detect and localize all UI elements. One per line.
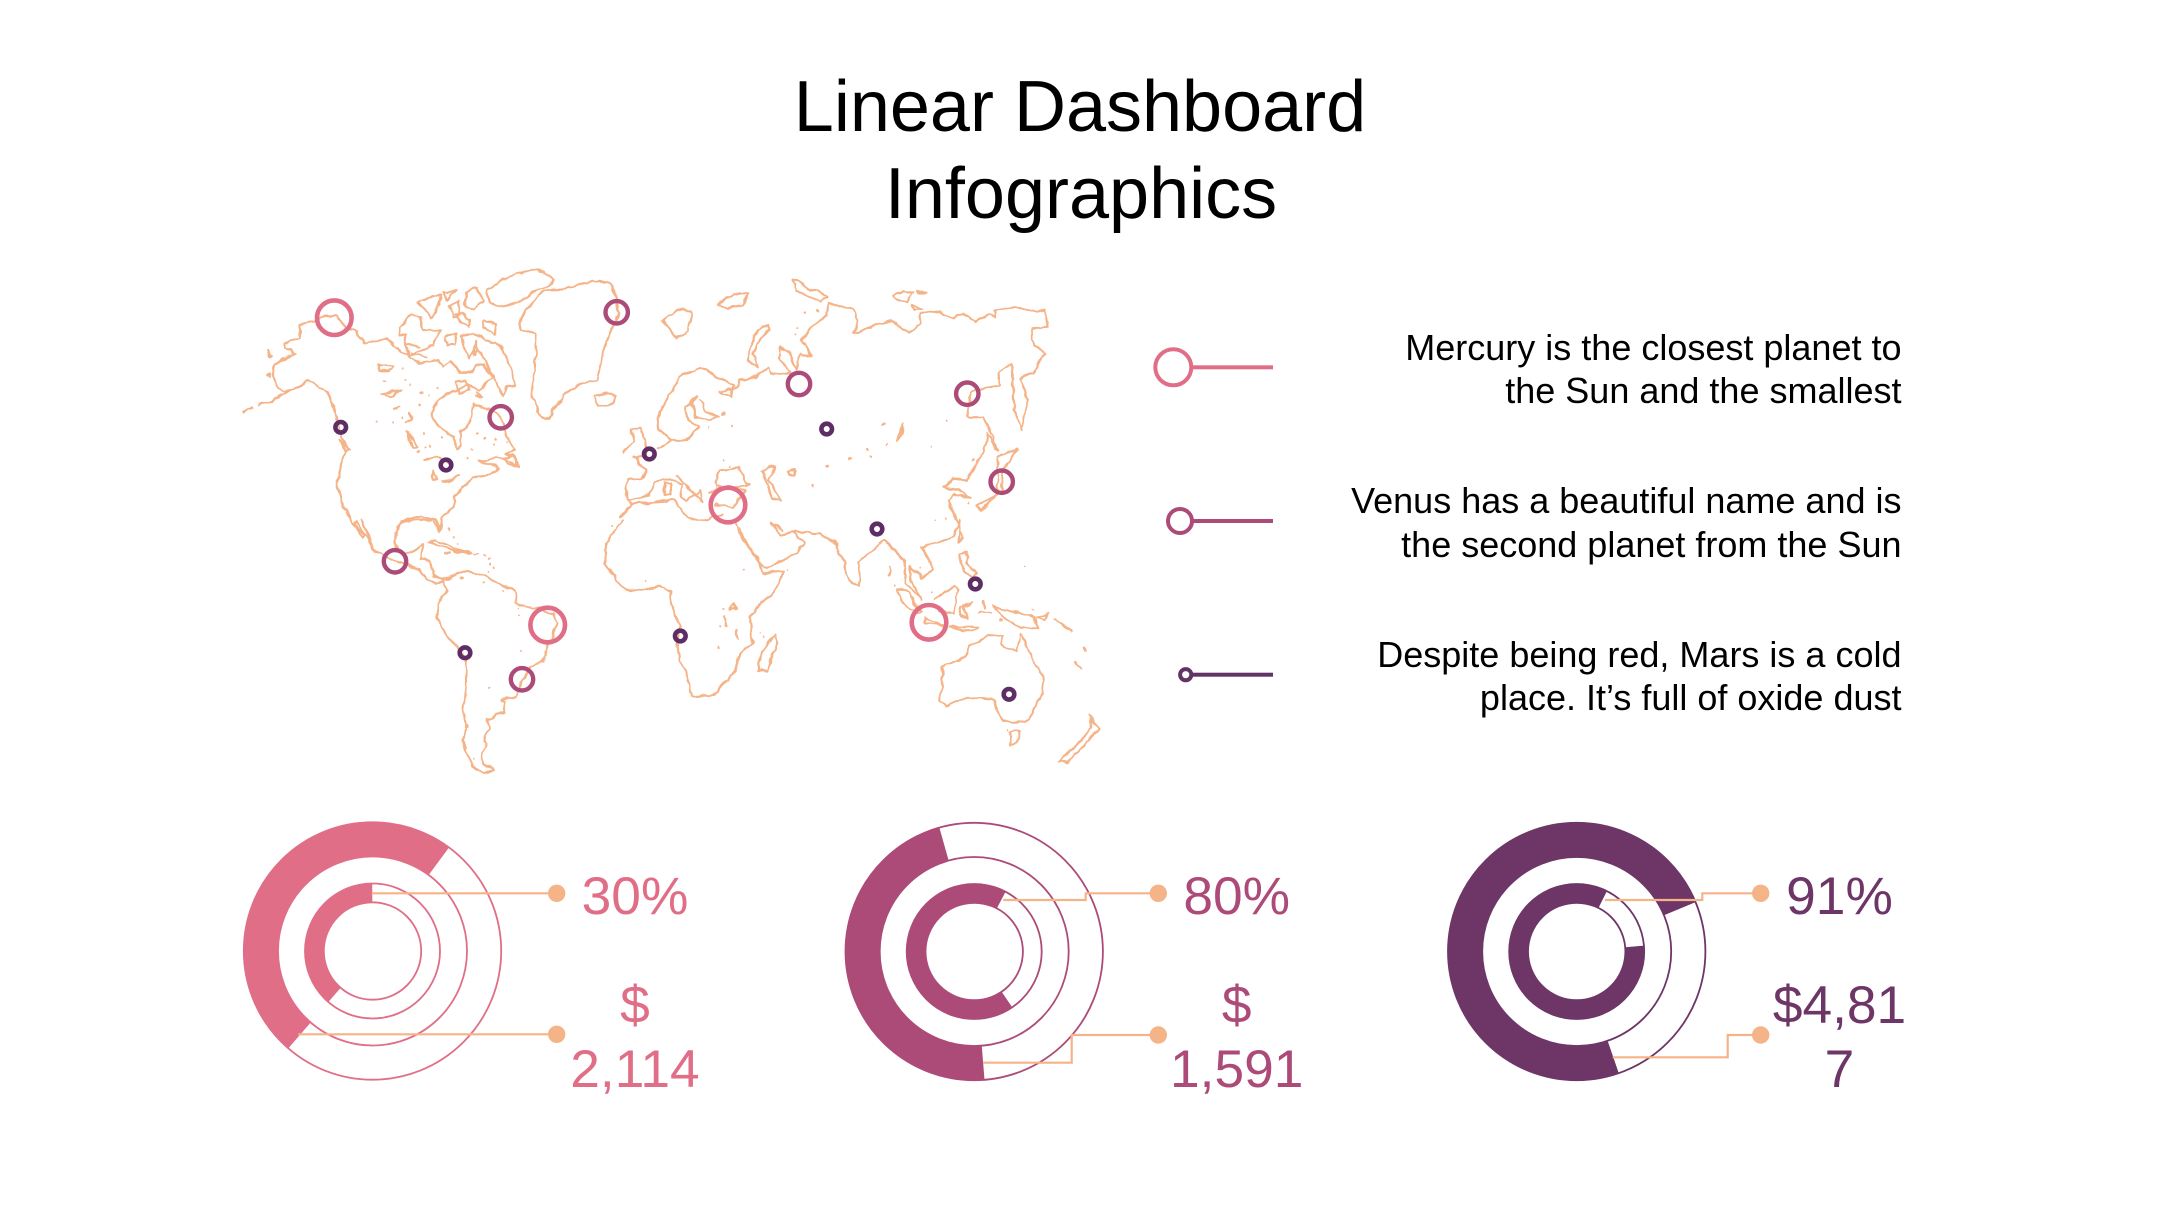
- legend: Mars: [1180, 634, 1902, 718]
- title: Infographics: [885, 154, 1277, 234]
- donut chart: magenta: [846, 823, 1103, 1080]
- leader lines: [1605, 885, 1769, 1057]
- map markers: medium magenta: [384, 301, 1013, 690]
- values: [1170, 867, 1303, 1099]
- world map: [243, 270, 1100, 773]
- leader lines: [983, 885, 1167, 1063]
- values: $4,81: [1773, 976, 1906, 1035]
- leader lines: [298, 885, 565, 1043]
- title: [794, 67, 1366, 234]
- values: 1,591: [1170, 1040, 1303, 1099]
- values: 80%: [1183, 867, 1290, 926]
- values: [570, 867, 700, 1099]
- donut panel: 91% / $4,817: [1448, 823, 1906, 1099]
- values: [1773, 867, 1906, 1099]
- donut chart: purple: [1448, 823, 1705, 1080]
- donut panel: 80% / $1,591: [846, 823, 1303, 1099]
- map markers: small purple: [335, 422, 1014, 700]
- values: 2,114: [570, 1040, 700, 1099]
- legend: Venus: Venus has a beautiful name and is: [1351, 480, 1902, 521]
- legend: Venus: [1168, 480, 1902, 565]
- values: 91%: [1786, 867, 1893, 926]
- donut panel: 30% / $2,114: [244, 822, 700, 1099]
- legend: Mercury: Mercury is the closest planet to: [1405, 327, 1902, 368]
- values: 7: [1825, 1040, 1854, 1099]
- title: Linear Dashboard: [794, 67, 1366, 147]
- legend: Mercury: the Sun and the smallest: [1505, 370, 1902, 411]
- legend: Venus: the second planet from the Sun: [1401, 524, 1902, 565]
- legend: Mercury: [1155, 327, 1902, 411]
- values: 30%: [582, 867, 688, 926]
- map markers: large pink: [317, 300, 946, 642]
- legend: Mars: Despite being red, Mars is a cold: [1377, 634, 1902, 675]
- donut chart: pink: [244, 822, 501, 1080]
- values: $: [1222, 976, 1252, 1035]
- legend: Mars: place. It’s full of oxide dust: [1480, 677, 1902, 718]
- values: $: [620, 976, 650, 1035]
